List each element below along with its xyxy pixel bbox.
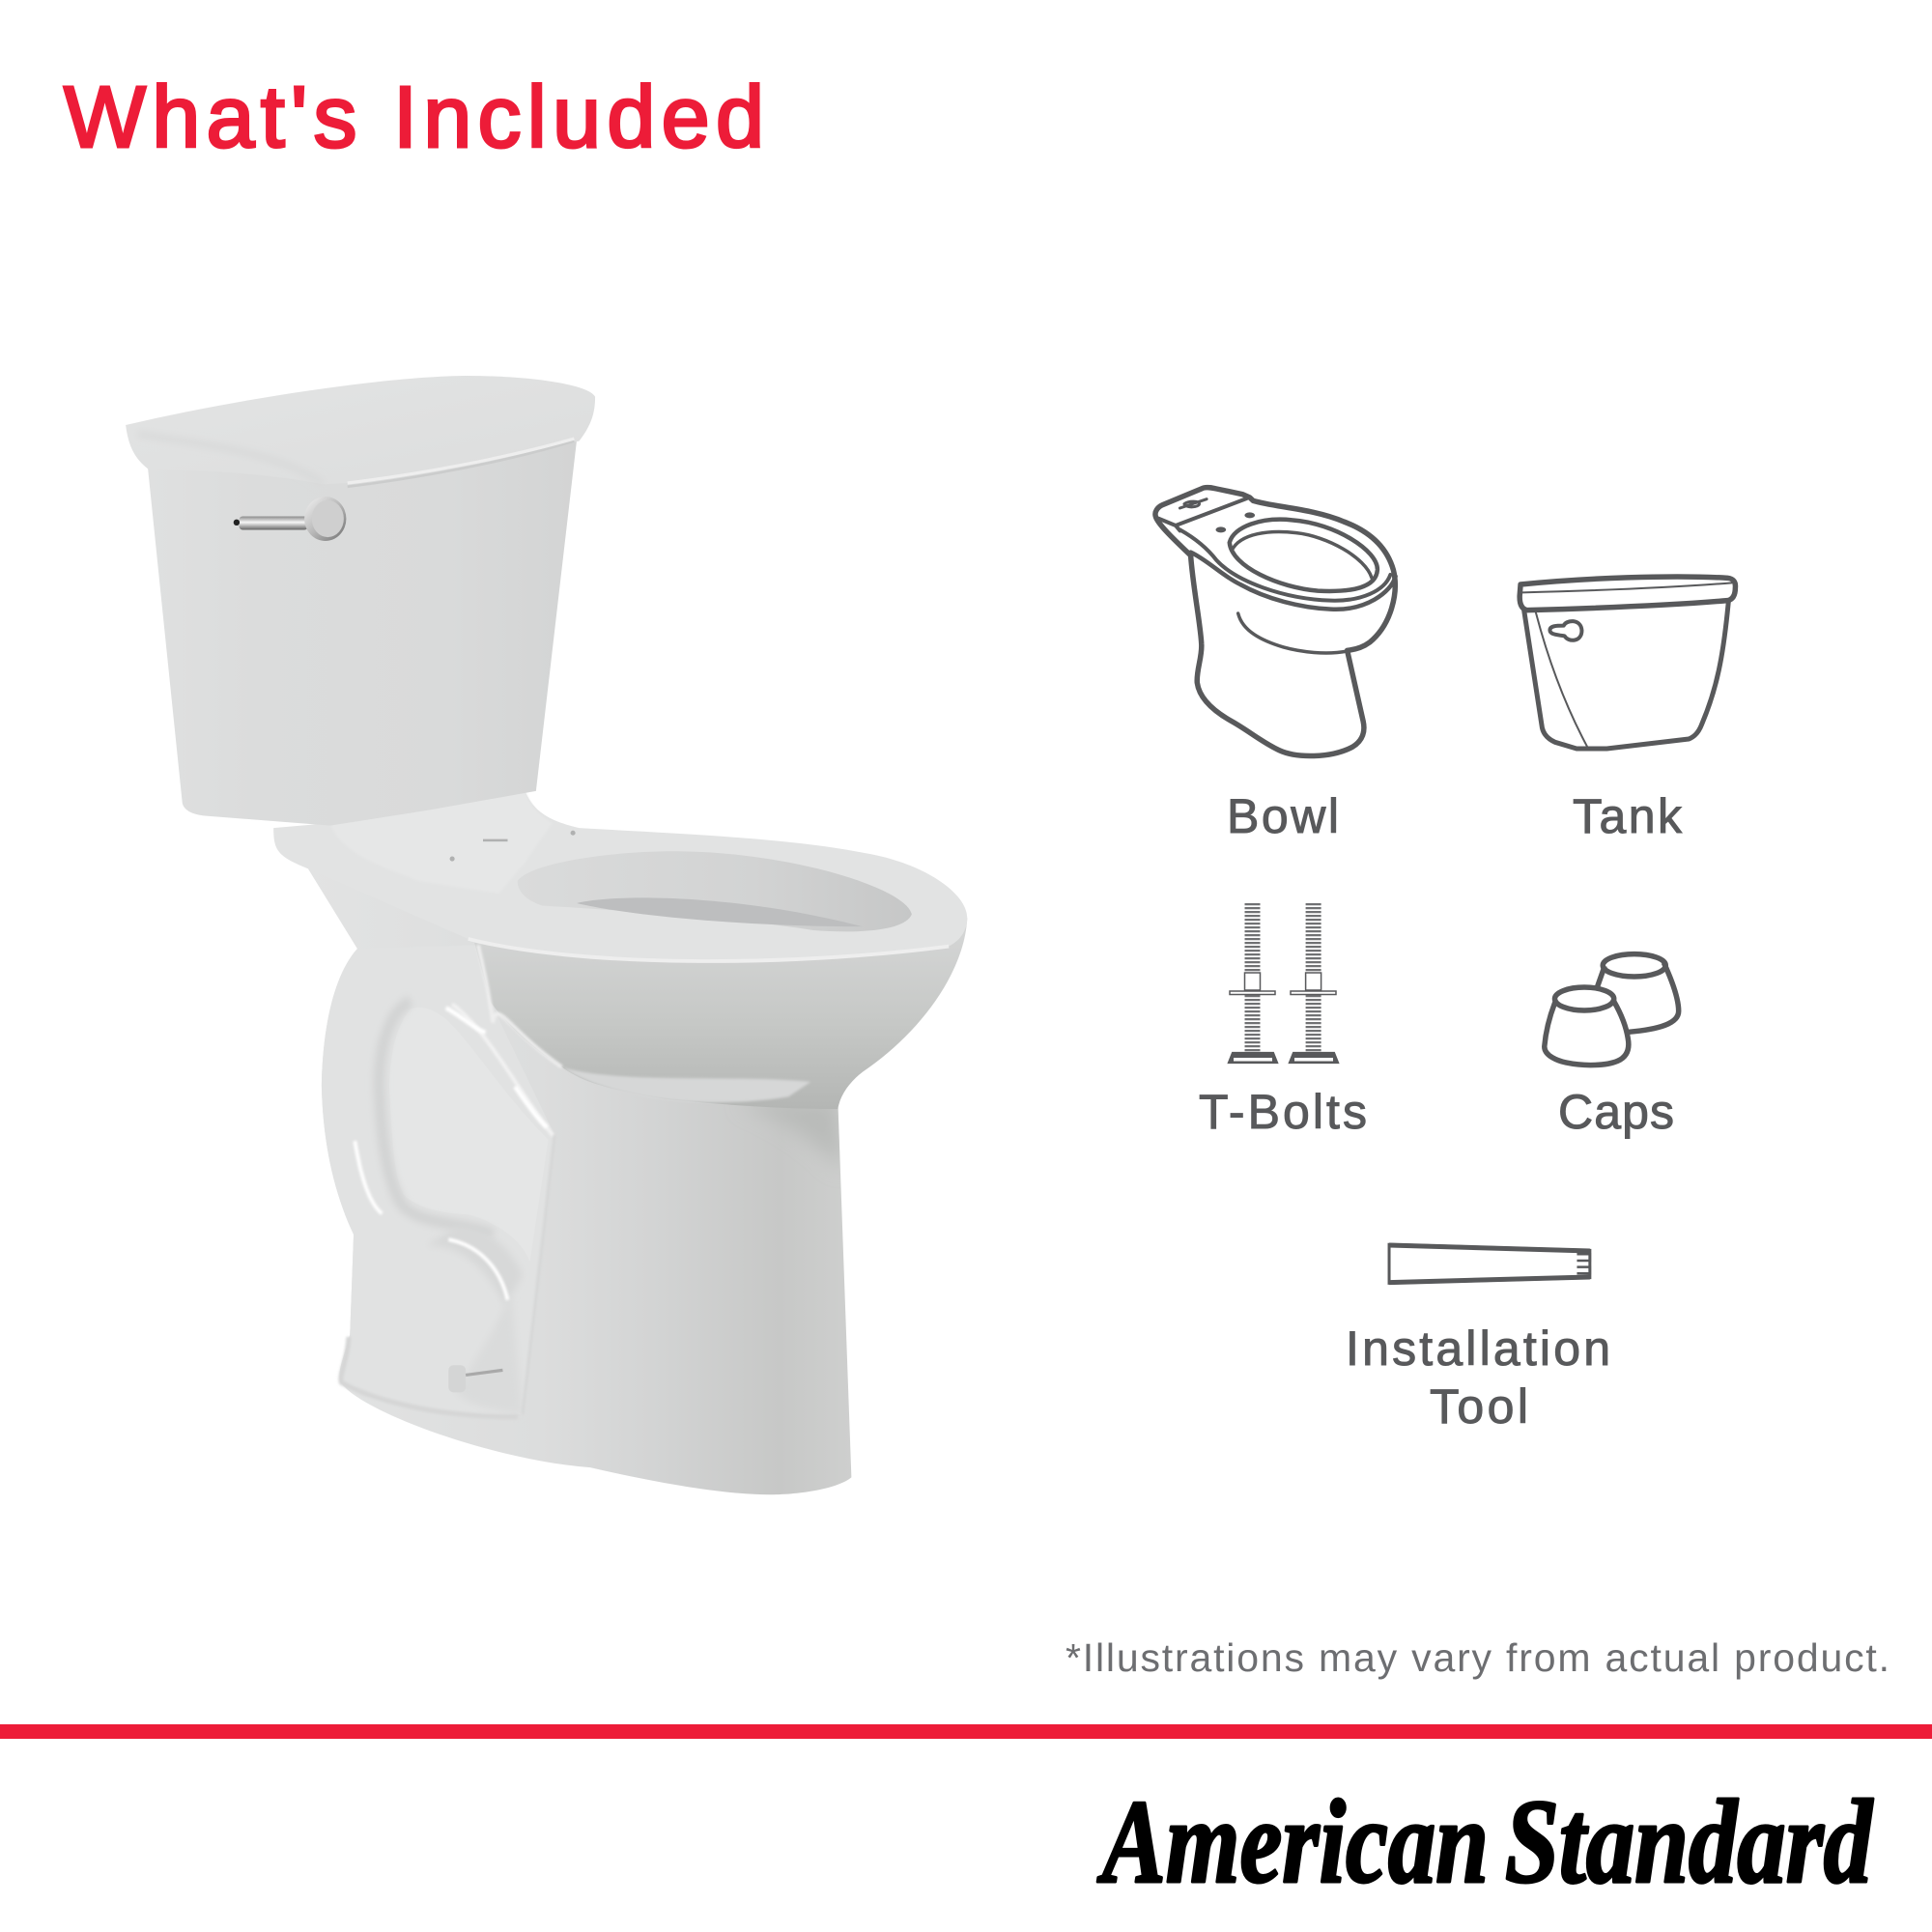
icon: bowl xyxy=(1155,488,1396,756)
title: What's Included xyxy=(64,70,764,166)
deck bolt holes xyxy=(450,831,576,862)
label: T-Bolts: T-Bolts xyxy=(1199,1085,1367,1139)
icon: tank xyxy=(1520,577,1735,749)
bolt left xyxy=(1229,903,1277,1063)
product photo: two-piece toilet xyxy=(126,376,967,1494)
side recess xyxy=(322,945,554,1417)
label: Installation Tool: Installation xyxy=(1346,1321,1610,1376)
neck shadow xyxy=(773,1107,840,1158)
bowl opening xyxy=(518,851,912,931)
icon: T-bolts xyxy=(1229,903,1338,1063)
logo: American Standard xyxy=(1096,1776,1874,1908)
bowl exterior xyxy=(474,918,967,1109)
logo: American Standard: American xyxy=(1096,1776,1489,1908)
label: Bowl: Bowl xyxy=(1227,789,1339,843)
tank lid xyxy=(126,376,595,484)
tank body xyxy=(148,441,577,826)
icon: installation tool xyxy=(1389,1244,1590,1283)
bolt right xyxy=(1290,903,1338,1063)
toilet body and base xyxy=(308,863,863,1494)
red divider bar xyxy=(0,1724,1932,1739)
label: Caps: Caps xyxy=(1558,1085,1674,1139)
label: Tank: Tank xyxy=(1573,789,1683,843)
label: Installation Tool xyxy=(1346,1321,1610,1434)
icon: caps xyxy=(1545,954,1679,1065)
label: Installation Tool: Tool xyxy=(1430,1379,1528,1434)
flush handle xyxy=(234,497,346,541)
bowl rim and deck xyxy=(273,791,967,961)
bowl inner water area xyxy=(577,897,863,926)
footnote: *Illustrations may vary from actual product. xyxy=(1065,1635,1889,1680)
